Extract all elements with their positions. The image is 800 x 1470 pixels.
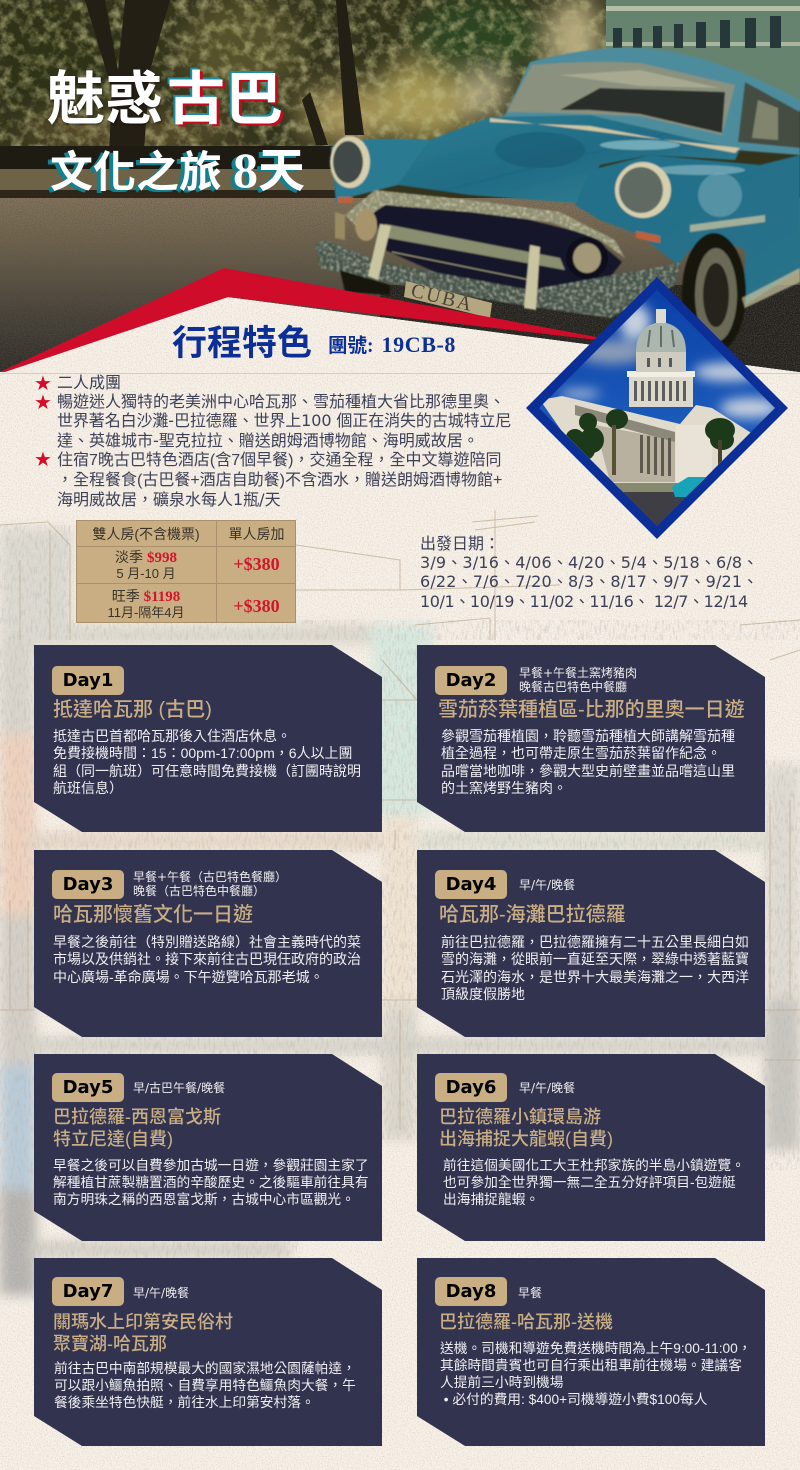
low season supplement: +$380 (233, 554, 280, 574)
day title: 聚寶湖-哈瓦那 (53, 1334, 167, 1354)
panel: day 4 (417, 850, 765, 1037)
panel: day 8 (417, 1258, 765, 1446)
day description: 的土窯烤野生豬肉。 (441, 780, 567, 796)
meals: 早/古巴午餐/晚餐 (133, 1081, 225, 1095)
departure dates: 10/1、10/19、11/02、11/16、 12/7、12/14 (420, 592, 748, 611)
day description (440, 1341, 752, 1407)
roof (500, 48, 800, 155)
day description (443, 1158, 745, 1207)
day description: 可以跟小鱷魚拍照、自費享用特色鱷魚肉大餐，午 (54, 1378, 356, 1393)
feature text: 住宿7晚古巴特色酒店(含7個早餐)，交通全程，全中文導遊陪同 (57, 452, 501, 469)
panel: day 5 (34, 1054, 382, 1241)
hood (398, 115, 740, 203)
day description: 組（同一航班）可任意時間免費接機（訂團時說明 (53, 763, 361, 779)
page background: paper and sketched buildings (0, 298, 800, 1470)
meals: 早/午/晚餐 (519, 1081, 575, 1095)
day description: 早餐之後前往（特別贈送路線）社會主義時代的菜 (53, 934, 361, 950)
day description: 航班信息） (53, 780, 123, 796)
red roof banner shape (0, 268, 800, 374)
day description (441, 728, 735, 796)
day description (53, 728, 361, 796)
day title (53, 1107, 221, 1149)
title line 1: 魅惑古巴 (47, 52, 283, 136)
departure dates (420, 534, 758, 611)
road (0, 198, 800, 378)
day description: 出海捕捉龍蝦。 (443, 1192, 539, 1207)
day description: 中心廣場-革命廣場。下午遊覽哈瓦那老城。 (53, 969, 324, 985)
left fender (331, 139, 430, 203)
day description: 南方明珠之稱的西恩富戈斯，古城中心市區觀光。 (53, 1192, 355, 1207)
day badge (52, 870, 124, 899)
day description: 植全過程，也可帶走原生雪茄菸葉留作紀念。 (441, 745, 721, 761)
day title: 特立尼達(自費) (53, 1129, 173, 1149)
day badge: Day8 (446, 1281, 496, 1302)
header: double room: 雙人房(不含機票) (92, 526, 200, 542)
high season supplement: +$380 (233, 596, 280, 616)
day description (54, 1361, 356, 1410)
panel: day 7 (34, 1258, 382, 1446)
day description: 送機。司機和導遊免費送機時間為上午9:00-11:00， (440, 1341, 752, 1356)
day title: 哈瓦那-海灘巴拉德羅 (439, 904, 626, 926)
panel: day 3 (34, 850, 382, 1037)
day description: 參觀雪茄種植園，聆聽雪茄種植大師講解雪茄種 (441, 728, 735, 744)
dome (629, 377, 693, 407)
day description: • 必付的費用: $400+司機導遊小費$100每人 (444, 1392, 707, 1407)
fence and sidewalk (0, 146, 335, 169)
feature text: 世界著名白沙灘-巴拉德羅、世界上100 個正在消失的古城特立尼 (57, 411, 511, 430)
day title (439, 1107, 613, 1149)
day badge: Day6 (446, 1077, 496, 1098)
high season price: 11月-隔年4月 (107, 605, 185, 620)
day badge: Day3 (63, 874, 113, 895)
main title (47, 52, 305, 201)
hero photo: vintage blue car on a Havana street (0, 0, 800, 372)
day description: 抵達古巴首都哈瓦那後入住酒店休息。 (53, 728, 291, 744)
day title: 巴拉德羅-西恩富戈斯 (53, 1107, 221, 1127)
day description (53, 934, 361, 985)
windshield (507, 62, 735, 135)
headlights (330, 136, 370, 188)
day description: 頂級度假勝地 (441, 986, 525, 1002)
meals: 早餐 (518, 1286, 542, 1300)
day badge (435, 666, 507, 695)
day description: 前往這個美國化工大王杜邦家族的半島小鎮遊覽。 (443, 1158, 745, 1173)
day description: 人提前三小時到機場 (440, 1375, 563, 1390)
meals: 早/午/晚餐 (133, 1286, 189, 1300)
icon: star: ★ (34, 447, 52, 471)
tree trunks (85, 0, 364, 146)
departure dates: 出發日期： (420, 534, 500, 553)
price table (76, 520, 296, 623)
bumper (315, 240, 680, 318)
low season price (115, 549, 177, 581)
day description: 早餐之後可以自費參加古城一日遊，參觀莊園主家了 (53, 1158, 369, 1173)
day badge (435, 870, 507, 899)
day badge: Day7 (63, 1281, 113, 1302)
day description (441, 934, 749, 1002)
small teal car (672, 477, 706, 497)
meals (133, 870, 287, 898)
day title: 哈瓦那懷舊文化一日遊 (53, 904, 253, 926)
meals: 早/午/晚餐 (519, 878, 575, 892)
day badge (52, 666, 124, 695)
section heading (172, 315, 456, 366)
meals (519, 666, 637, 694)
day badge: Day2 (446, 670, 496, 691)
tour code: 團號: 19CB-8 (328, 332, 456, 357)
meals: 晚餐（古巴特色中餐廳） (133, 884, 265, 898)
meals: 早餐+午餐（古巴特色餐廳） (133, 870, 287, 884)
feature text: ，全程餐食(古巴餐+酒店自助餐)不含酒水，贈送朗姆酒博物館+ (57, 472, 502, 489)
day description: 餐後乘坐特色快艇，前往水上印第安村落。 (54, 1395, 315, 1410)
capitol photo in blue diamond (526, 277, 788, 539)
panel: day 2 (417, 645, 765, 832)
building (606, 0, 800, 110)
day badge (52, 1073, 124, 1102)
day badge: Day5 (63, 1077, 113, 1098)
feature text: 暢遊迷人獨特的老美洲中心哈瓦那、雪茄種植大省比那德里奧、 (57, 392, 505, 411)
day badge: Day1 (63, 670, 113, 691)
feature text: 二人成團 (57, 373, 121, 392)
car (310, 48, 800, 353)
title line 2: 文化之旅8天 (50, 132, 305, 201)
feature text (57, 373, 511, 509)
meals: 早餐+午餐土窯烤豬肉 (519, 666, 637, 680)
panel: day 6 (417, 1054, 765, 1241)
day badge (435, 1073, 507, 1102)
day description (53, 1158, 369, 1207)
icon: star: ★ (34, 371, 52, 395)
icon: star: ★ (34, 390, 52, 414)
departure dates: 6/22、7/6、7/20、8/3、8/17、9/7、9/21、 (420, 572, 758, 591)
low season price: 5 月-10 月 (116, 566, 176, 581)
grille (370, 205, 622, 292)
high season price: 旺季 $1198 (112, 588, 180, 605)
day title: 關瑪水上印第安民俗村 (53, 1312, 233, 1332)
day title: 巴拉德羅小鎮環島游 (439, 1107, 601, 1127)
day badge: Day4 (446, 874, 496, 895)
day description: 免費接機時間：15：00pm-17:00pm，6人以上團 (53, 745, 353, 761)
day description: 石光澤的海水，是世界十大最美海灘之一，大西洋 (441, 969, 749, 985)
building wings (542, 396, 750, 490)
feature text: 達、英雄城市-聖克拉拉、贈送朗姆酒博物館、海明威故居。 (57, 431, 479, 450)
day title: 出海捕捉大龍蝦(自費) (439, 1129, 613, 1149)
licence plate: CUBA (409, 280, 476, 316)
day title: 巴拉德羅-哈瓦那-送機 (439, 1312, 613, 1332)
day description: 其餘時間貴賓也可自行乘出租車前往機場。建議客 (440, 1358, 742, 1373)
tyres (340, 270, 390, 295)
departure dates: 3/9、3/16、4/06、4/20、5/4、5/18、6/8、 (420, 553, 758, 572)
day title: 抵達哈瓦那 (古巴) (53, 699, 212, 721)
street (614, 483, 700, 493)
palms (566, 409, 735, 460)
right fender and side (575, 155, 800, 305)
meals: 晚餐古巴特色中餐廳 (519, 680, 627, 694)
day title: 雪茄菸葉種植區-比那的里奧一日遊 (438, 699, 745, 721)
side window (738, 82, 800, 148)
high season price (107, 588, 185, 620)
day description: 也可參加全世界獨一無二全五分好評項目-包遊艇 (443, 1175, 736, 1190)
heading text: 行程特色 (172, 315, 312, 366)
day title (53, 1312, 233, 1354)
day description: 解種植甘蔗製糖置酒的辛酸歷史。之後驅車前往具有 (53, 1175, 369, 1190)
day description: 品嚐當地咖啡，參觀大型史前壁畫並品嚐這山里 (441, 763, 735, 779)
panel: day 1 (34, 645, 382, 832)
tour features list (34, 371, 511, 509)
day description: 雪的海灘，從眼前一直延至天際，翠綠中透著藍寶 (441, 951, 749, 967)
day description: 市場以及供銷社。接下來前往古巴現任政府的政治 (53, 951, 361, 967)
day description: 前往巴拉德羅，巴拉德羅擁有二十五公里長細白如 (441, 934, 749, 950)
day badge (52, 1277, 124, 1306)
day description: 前往古巴中南部規模最大的國家濕地公園薩帕達， (54, 1361, 356, 1376)
header: single room: 單人房加 (228, 526, 284, 542)
feature text: 海明威故居，礦泉水每人1瓶/天 (57, 490, 281, 509)
low season price: 淡季 $998 (115, 549, 177, 566)
day badge (435, 1277, 507, 1306)
